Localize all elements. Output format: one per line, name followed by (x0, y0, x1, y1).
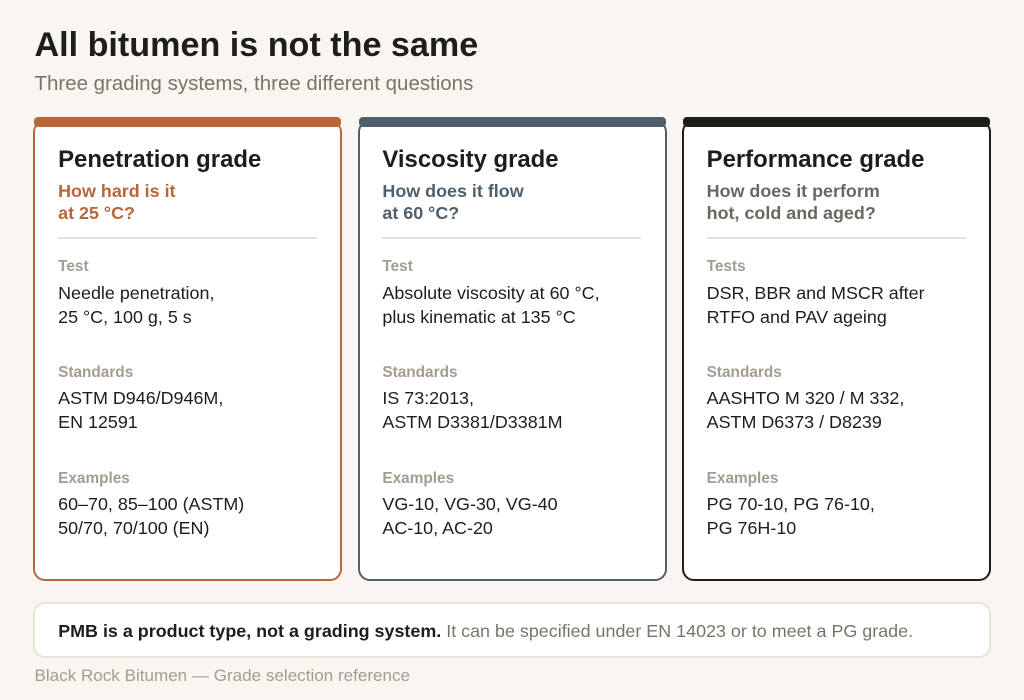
standards text: ASTM D6373 / D8239 (707, 412, 882, 432)
standards label: Standards (382, 364, 458, 381)
tests text: RTFO and PAV ageing (707, 307, 887, 327)
examples text (58, 494, 244, 538)
test label: Test (58, 258, 89, 275)
test text: plus kinematic at 135 °C (382, 307, 576, 327)
examples text: AC-10, AC-20 (382, 518, 493, 538)
standards text: IS 73:2013, (382, 388, 474, 408)
title: All bitumen is not the same (34, 26, 478, 64)
card accent bar (34, 117, 341, 127)
card question: hot, cold and aged? (707, 203, 876, 223)
callout: PMB note (33, 602, 991, 658)
card question (707, 181, 880, 223)
tests text: DSR, BBR and MSCR after (707, 283, 925, 303)
test text: 25 °C, 100 g, 5 s (58, 307, 192, 327)
examples text: 50/70, 70/100 (EN) (58, 518, 209, 538)
card question (382, 181, 524, 223)
test text (58, 283, 214, 327)
card heading: Performance grade (707, 146, 924, 173)
examples text (382, 494, 558, 538)
panel: viscosity grade (358, 117, 667, 581)
standards text (58, 388, 223, 432)
card question (58, 181, 176, 223)
standards label: Standards (707, 364, 782, 381)
callout: PMB note: PMB is a product type, not a grading system. It can be specified under EN 14023 or to meet a PG grade. (58, 621, 913, 641)
card accent bar (683, 117, 990, 127)
standards text (706, 388, 904, 432)
card question: at 60 °C? (382, 203, 459, 223)
examples label: Examples (58, 470, 130, 487)
panel: penetration grade (33, 117, 342, 581)
tests label: Tests (707, 258, 746, 275)
card question: How hard is it (58, 181, 176, 201)
standards text: ASTM D3381/D3381M (382, 412, 563, 432)
card question: How does it perform (707, 181, 880, 201)
card accent bar (359, 117, 666, 127)
examples label: Examples (382, 470, 454, 487)
examples text: PG 70-10, PG 76-10, (707, 494, 875, 514)
examples text: PG 76H-10 (707, 518, 796, 538)
standards text (382, 388, 563, 432)
card frame (358, 120, 667, 581)
test text (382, 283, 600, 327)
standards label: Standards (58, 364, 133, 381)
card heading: Penetration grade (58, 146, 261, 173)
test text: Absolute viscosity at 60 °C, (382, 283, 600, 303)
examples text: VG-10, VG-30, VG-40 (382, 494, 558, 514)
examples label: Examples (707, 470, 778, 487)
test label: Test (382, 258, 413, 275)
standards text: ASTM D946/D946M, (58, 388, 223, 408)
examples text (707, 494, 875, 538)
examples text: 60–70, 85–100 (ASTM) (58, 494, 244, 514)
card frame (682, 120, 991, 581)
standards text: EN 12591 (58, 412, 138, 432)
tests text (707, 283, 925, 327)
card frame (33, 120, 342, 581)
card heading: Viscosity grade (382, 146, 559, 173)
standards text: AASHTO M 320 / M 332, (707, 388, 904, 408)
card question: at 25 °C? (58, 203, 135, 223)
panel: performance grade (682, 117, 991, 581)
test text: Needle penetration, (58, 283, 214, 303)
subtitle: Three grading systems, three different questions (34, 72, 473, 95)
card question: How does it flow (382, 181, 524, 201)
footer: Black Rock Bitumen — Grade selection reference (34, 666, 410, 685)
